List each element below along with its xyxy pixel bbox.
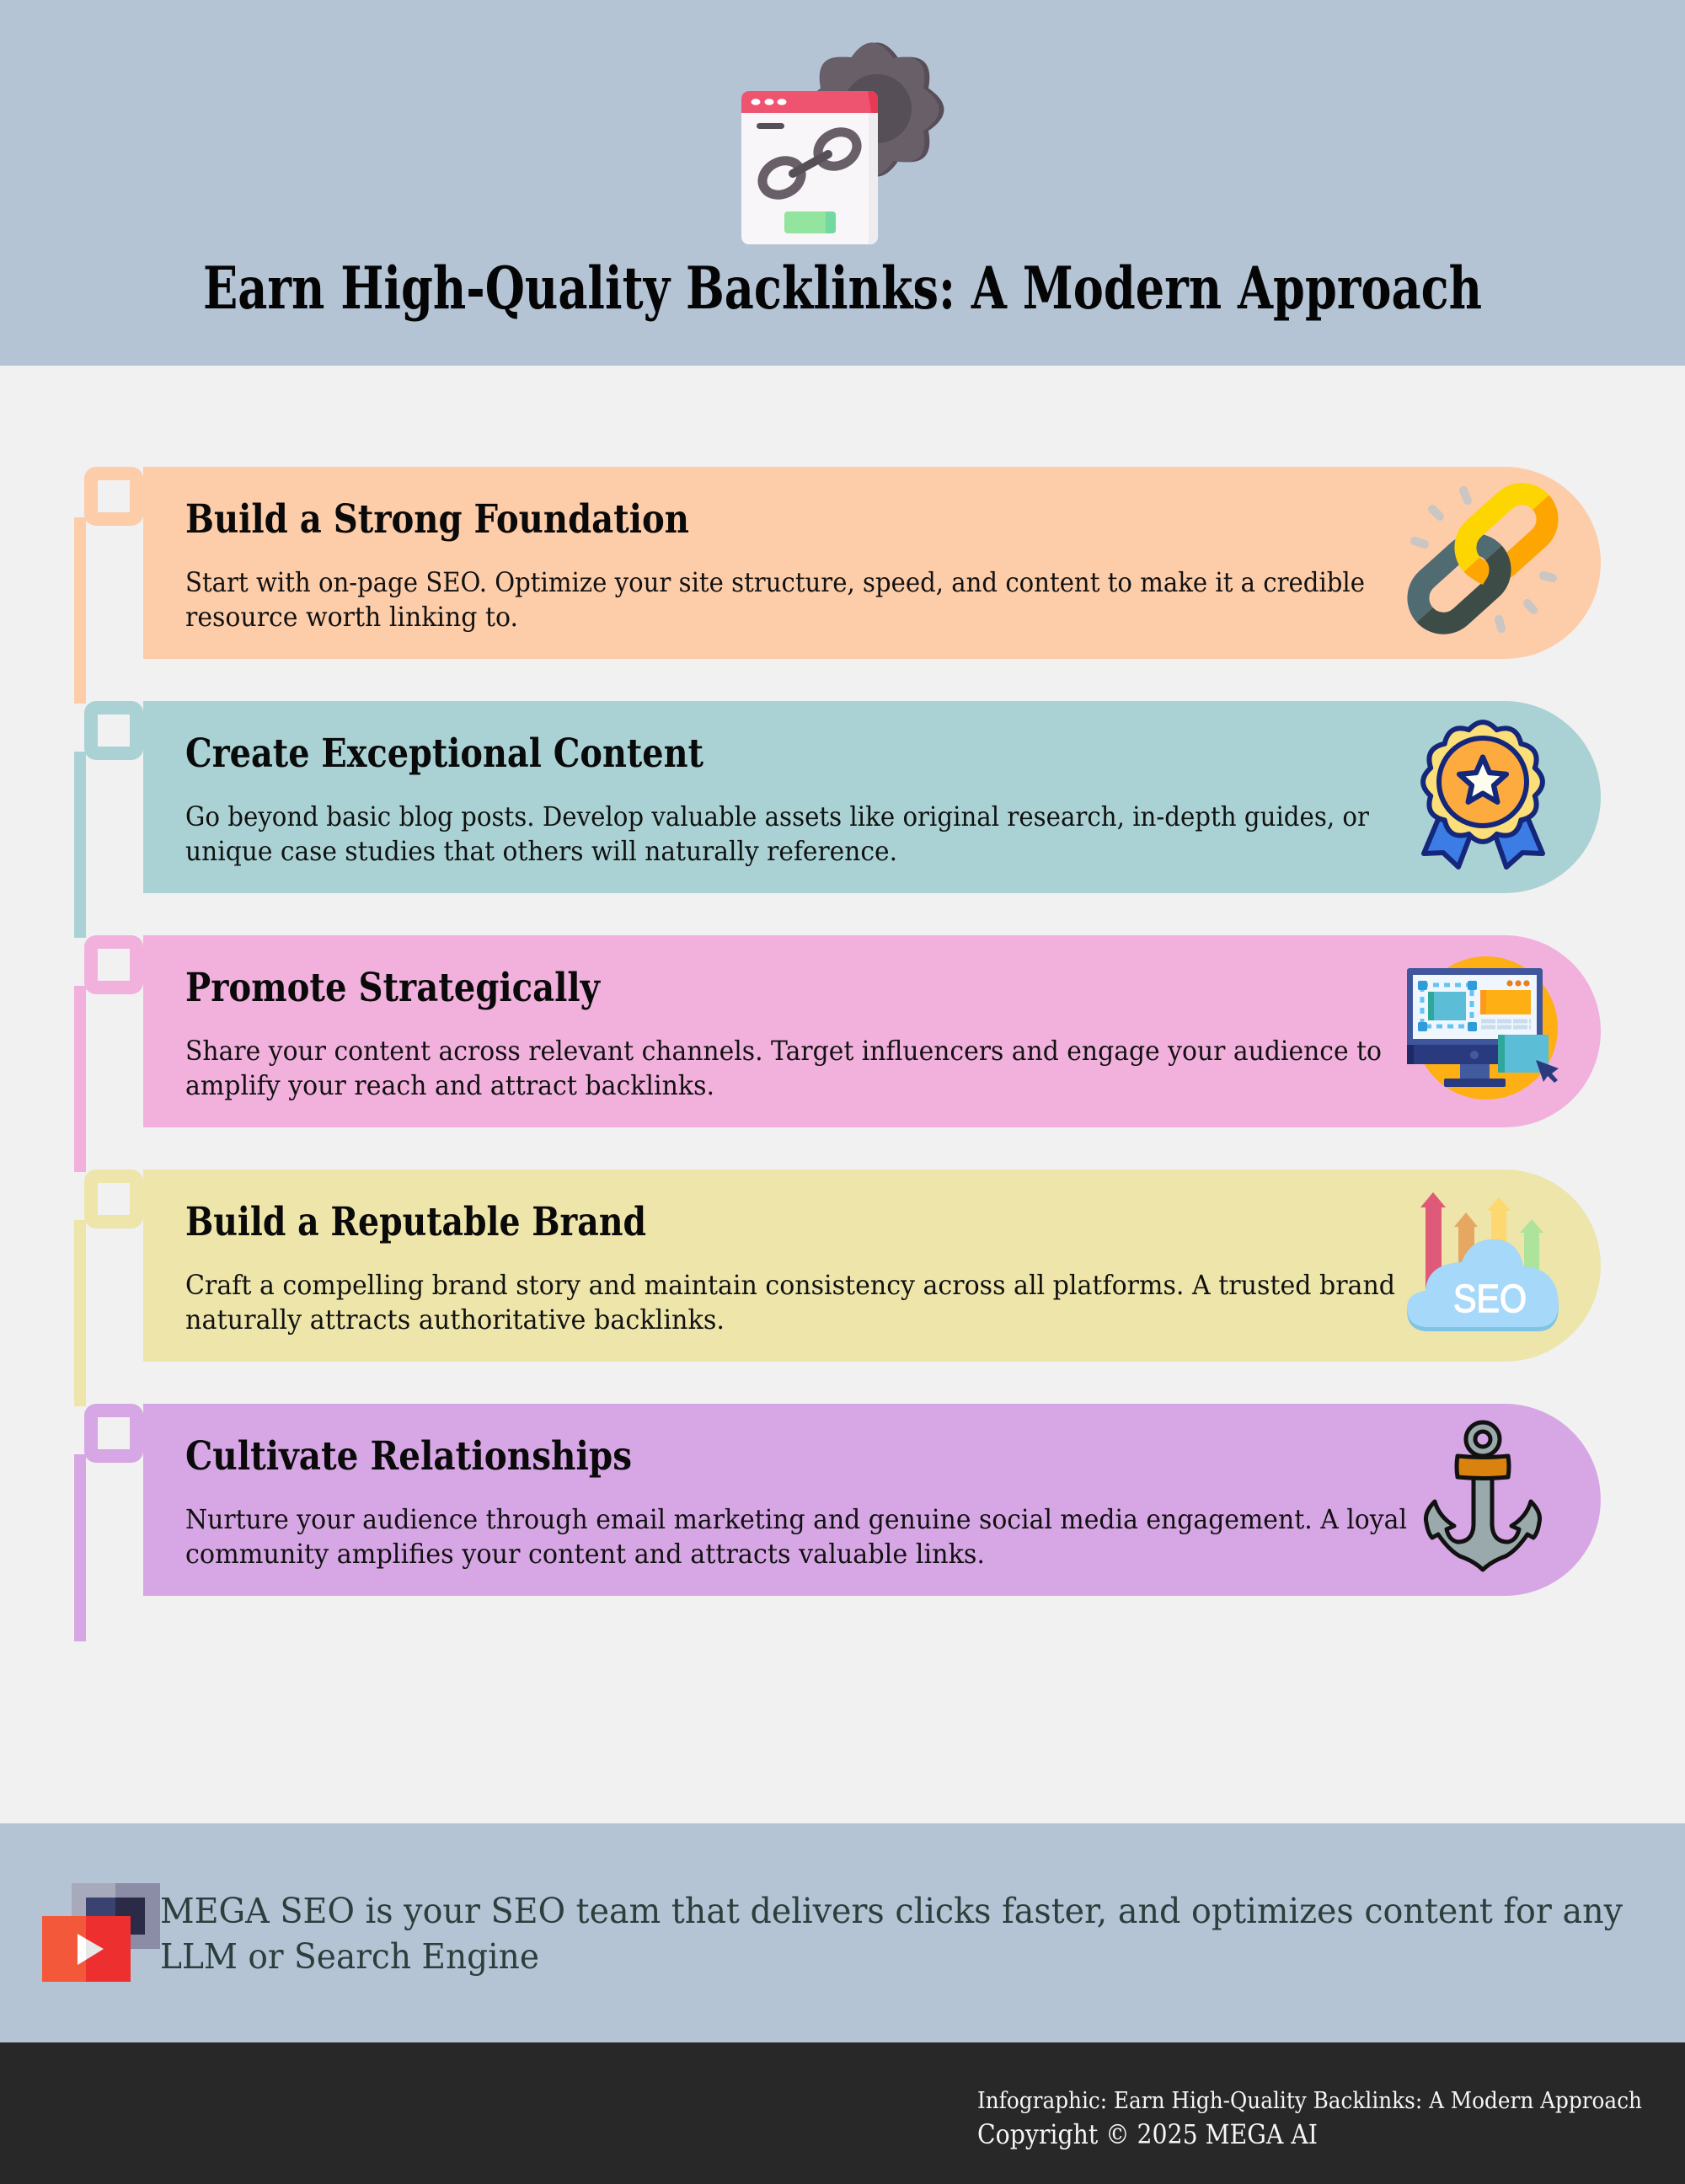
panel: step 5 cultivate relationships <box>74 1404 1601 1641</box>
heading: step 4: Build a Reputable Brand <box>185 1199 646 1245</box>
panel: step 1 build a strong foundation <box>74 467 1601 704</box>
text: step 2 description: Go beyond basic blog posts. Develop valuable assets like original research, in-depth guides, or <box>185 800 1370 832</box>
text: step 2 description <box>185 800 1370 867</box>
heading: step 2: Create Exceptional Content <box>185 731 703 777</box>
icon: SEO cloud with rising arrows <box>1407 1192 1559 1331</box>
panel: promo footer band <box>0 1823 1685 2042</box>
text: step 3 description: Share your content across relevant channels. Target influencers and engage your audience to <box>185 1035 1382 1067</box>
text: step 4 description <box>185 1269 1395 1336</box>
text: promo message <box>160 1891 1623 1977</box>
text: step 4 description: naturally attracts authoritative backlinks. <box>185 1303 725 1336</box>
text: step 1 description: Start with on-page SEO. Optimize your site structure, speed, and content to make it a credible <box>185 566 1365 598</box>
text: step 3 description <box>185 1035 1382 1101</box>
text: step 1 description: resource worth linking to. <box>185 601 518 633</box>
text: step 5 description: Nurture your audience through email marketing and genuine social media engagement. A loyal <box>185 1503 1407 1535</box>
panel: step 2 create exceptional content <box>74 701 1601 938</box>
heading: step 1: Build a Strong Foundation <box>185 496 689 543</box>
text: infographic credit: Infographic: Earn High-Quality Backlinks: A Modern Approach <box>977 2088 1642 2114</box>
text: step 1 description <box>185 566 1365 633</box>
panel: step 4 build a reputable brand <box>74 1170 1601 1406</box>
text: promo message: LLM or Search Engine <box>160 1936 539 1977</box>
icon: monitor with web design layout <box>1407 956 1559 1100</box>
header band <box>0 0 1685 366</box>
panel: copyright bar <box>0 2042 1685 2184</box>
text: step 3 description: amplify your reach and attract backlinks. <box>185 1069 714 1101</box>
text: step 5 description: community amplifies your content and attracts valuable links. <box>185 1538 985 1570</box>
text: step 4 description: Craft a compelling brand story and maintain consistency across all platforms. A trusted brand <box>185 1269 1395 1301</box>
icon: gear and browser window with chain link <box>741 42 944 244</box>
text: step 5 description <box>185 1503 1407 1570</box>
icon: award medal <box>1423 722 1543 867</box>
icon: anchor <box>1426 1422 1540 1570</box>
heading: step 3: Promote Strategically <box>185 965 601 1011</box>
icon: chain links <box>1408 484 1558 634</box>
panel: step 3 promote strategically <box>74 935 1601 1172</box>
icon: video play logo <box>42 1883 160 1982</box>
icon: SEO cloud with rising arrows: SEO <box>1453 1277 1527 1320</box>
text: promo message: MEGA SEO is your SEO team that delivers clicks faster, and optimizes content for any <box>160 1891 1623 1931</box>
text: step 2 description: unique case studies that others will naturally reference. <box>185 835 897 867</box>
heading: step 5: Cultivate Relationships <box>185 1433 632 1480</box>
text: copyright: Copyright © 2025 MEGA AI <box>977 2118 1318 2150</box>
